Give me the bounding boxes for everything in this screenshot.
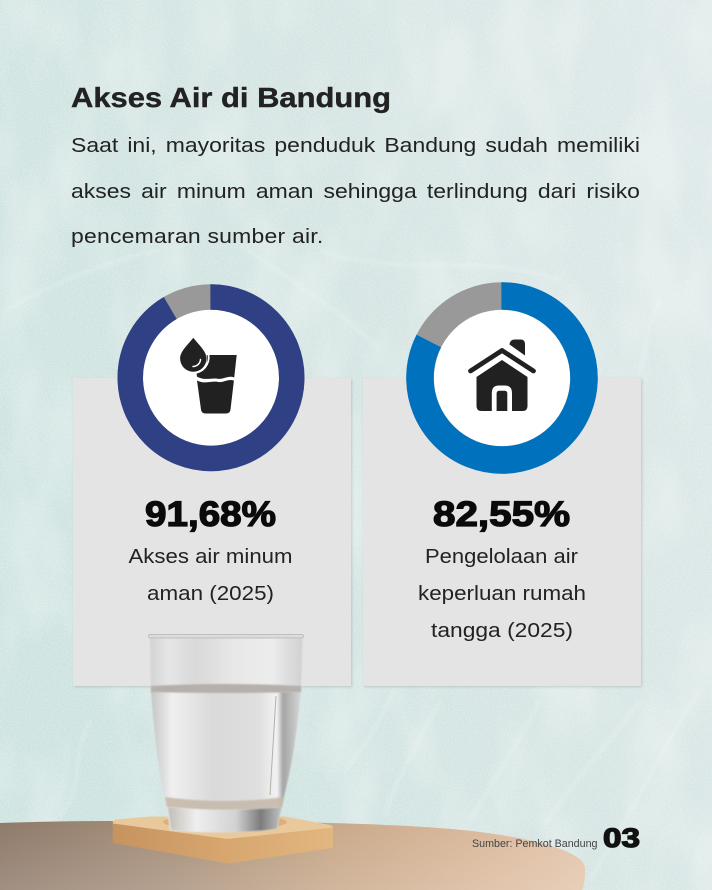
- text block: intro paragraph: [71, 134, 640, 248]
- title: Akses Air di Bandung: [71, 82, 391, 113]
- panel: pengelolaan air card: [363, 378, 641, 686]
- label: akses air minum aman: aman (2025): [147, 583, 274, 605]
- text block: intro paragraph: akses air minum aman sehingga terlindung dari risiko: [71, 180, 640, 202]
- label: akses air minum aman: Akses air minum: [128, 546, 292, 568]
- text block: intro paragraph: pencemaran sumber air.: [71, 225, 324, 248]
- label: pengelolaan air keperluan rumah tangga: tangga (2025): [431, 620, 573, 642]
- glass of water: [148, 634, 304, 832]
- label: pengelolaan air keperluan rumah tangga: Pengelolaan air: [425, 546, 578, 568]
- panel: akses air minum card: [73, 378, 351, 686]
- coaster: [113, 814, 333, 863]
- icon: house: [470, 340, 534, 411]
- donut chart: 82,55%: [420, 296, 584, 460]
- source note: Sumber: Pemkot Bandung: [472, 838, 598, 850]
- icon: glass with water drop: [180, 338, 237, 414]
- label: pengelolaan air keperluan rumah tangga: keperluan rumah: [418, 583, 586, 605]
- table top: [0, 821, 585, 890]
- page number: 03: [603, 823, 640, 853]
- stat: 82,55%: 82,55%: [433, 495, 570, 534]
- label: pengelolaan air keperluan rumah tangga: [418, 546, 586, 642]
- label: akses air minum aman: [128, 546, 292, 605]
- donut chart: 91,68%: [130, 297, 292, 458]
- text block: intro paragraph: Saat ini, mayoritas penduduk Bandung sudah memiliki: [71, 134, 640, 157]
- stat: 91,68%: 91,68%: [145, 495, 276, 534]
